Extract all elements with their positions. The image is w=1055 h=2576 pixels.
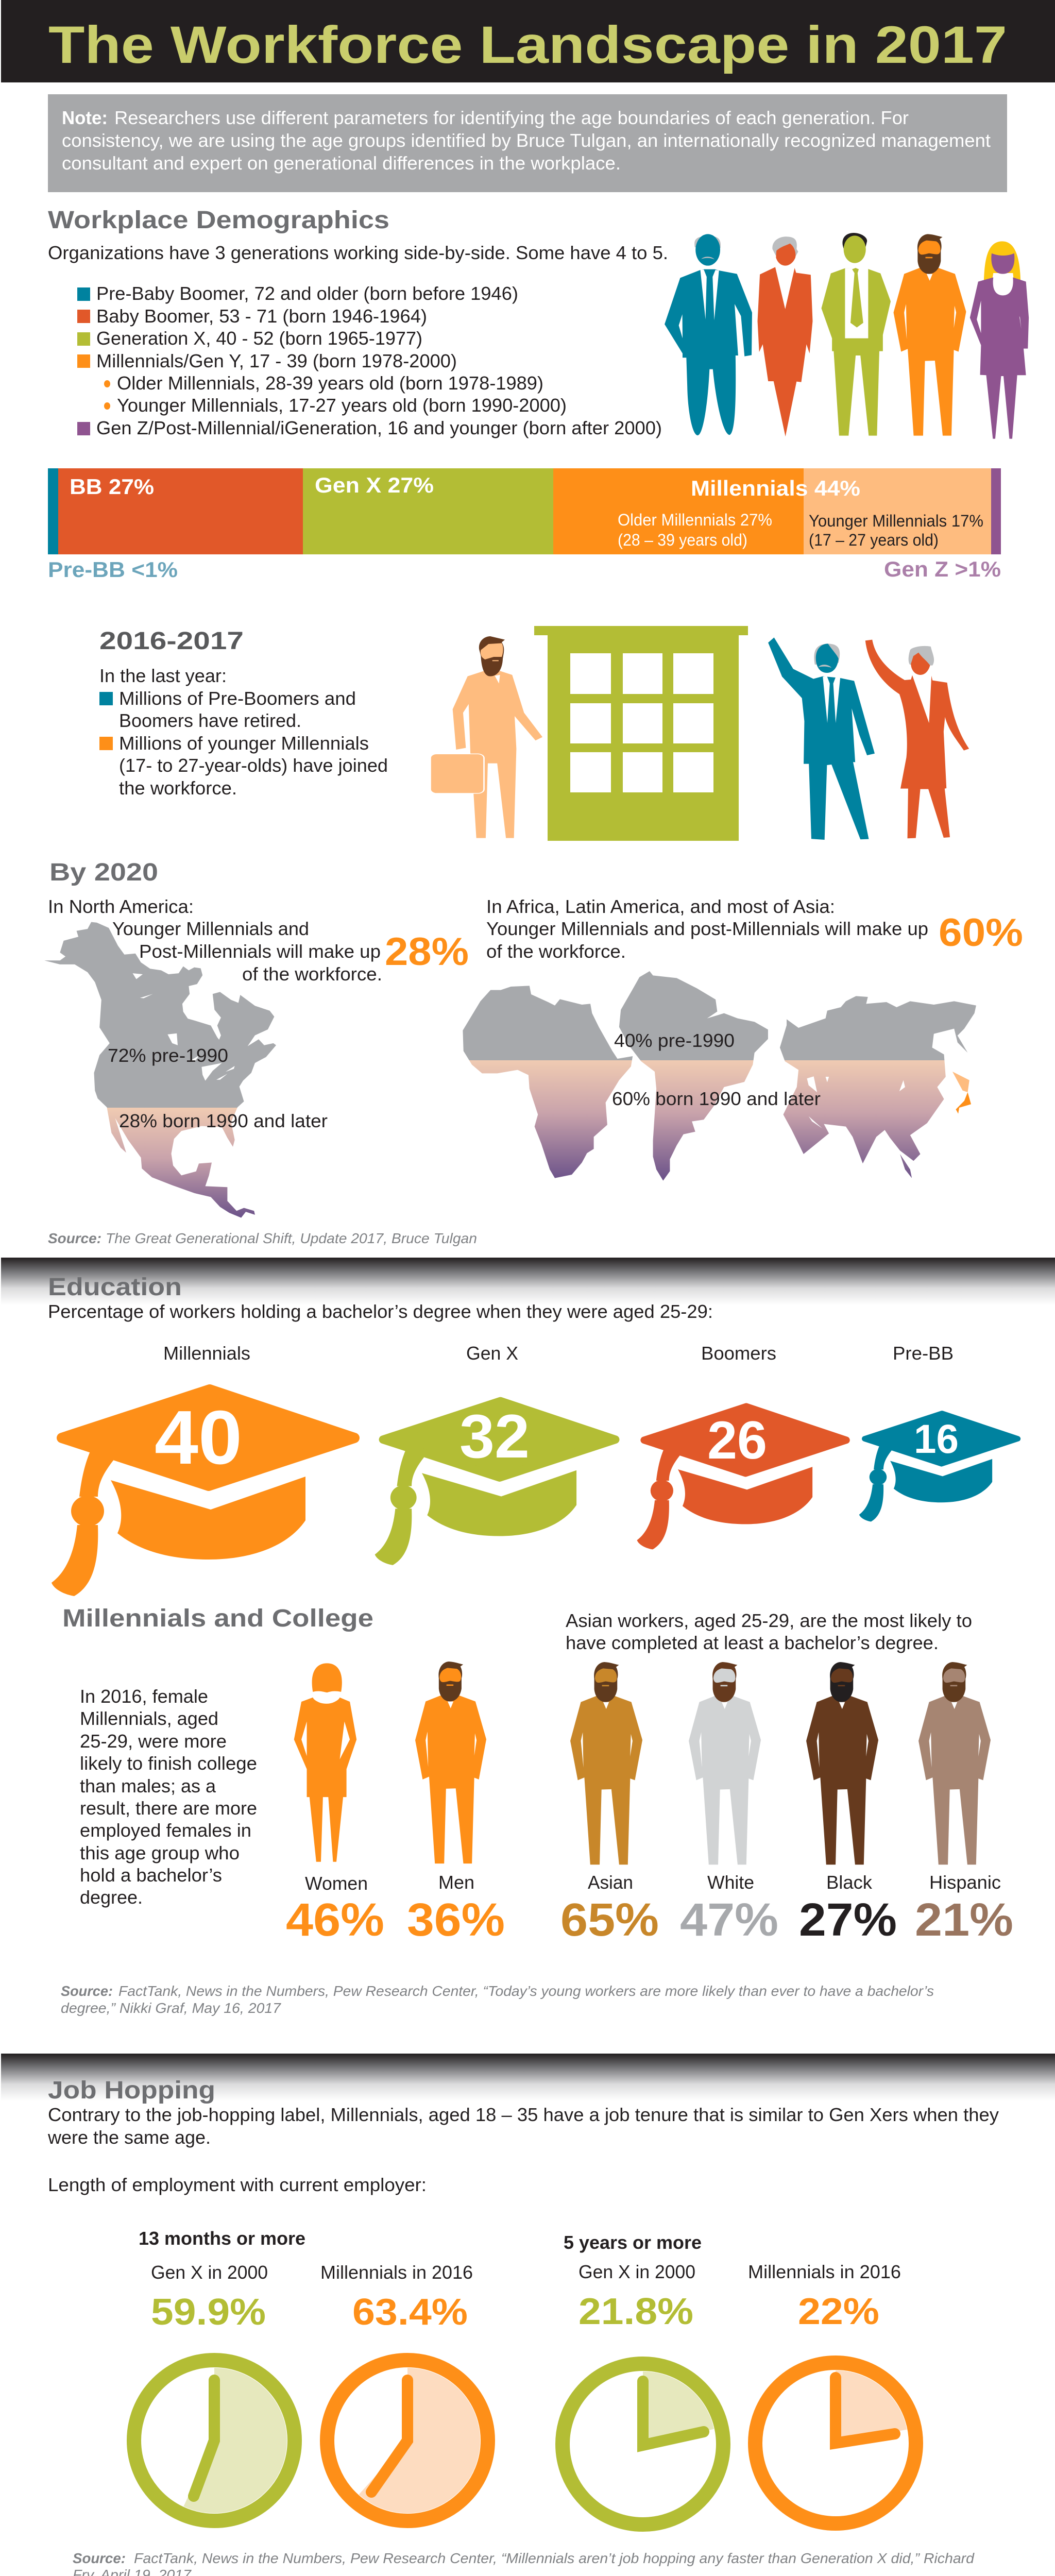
panel: 2016-2017 <box>99 626 969 841</box>
generation legend: Gen Z/Post-Millennial/iGeneration, 16 and younger (born after 2000) <box>96 417 662 438</box>
text: female millennials: likely to finish college <box>80 1753 257 1774</box>
cap label: boomers: Boomers <box>701 1343 776 1364</box>
intro text: Percentage of workers holding a bachelor’s degree when they were aged 25-29: <box>48 1301 713 1322</box>
text: north america: of the workforce. <box>242 963 382 985</box>
figure: pre-baby boomer <box>665 234 752 435</box>
figure: men <box>415 1662 486 1863</box>
generation legend: Older Millennials, 28-39 years old (born 1978-1989) <box>117 372 543 394</box>
source: job hopping: FactTank, News in the Numbers, Pew Research Center, “Millennials aren’t job hopping any faster than Generation X did,” Richard <box>134 2550 975 2566</box>
text: asian workers: have completed at least a bachelor’s degree. <box>566 1632 939 1653</box>
clock: millennials 13 months: 63.4% <box>352 2292 468 2333</box>
figure: retiring boomer man waving <box>768 637 875 840</box>
stat: 28%: 28% <box>385 930 469 974</box>
text: female millennials: result, there are more <box>80 1798 257 1819</box>
panel: note <box>48 94 1007 192</box>
percentages: 36% <box>407 1894 505 1946</box>
source: education: Source: <box>61 1983 113 1999</box>
text: in the last year: Millions of Pre-Boomers and <box>119 688 356 709</box>
text: female millennials: employed females in <box>80 1820 251 1841</box>
text: female millennials <box>80 1686 257 1908</box>
source: education: FactTank, News in the Numbers, Pew Research Center, “Today’s young workers are more likely than ever to have a bachelor’s <box>118 1983 934 1999</box>
cap label: pre-bb: Pre-BB <box>893 1343 954 1364</box>
panel: education <box>1 1258 1055 2016</box>
bar label: pre-bb: Pre-BB <1% <box>48 557 178 582</box>
clock: millennials 13 months <box>320 2262 488 2521</box>
map label: 40% pre-1990: 40% pre-1990 <box>614 1030 735 1051</box>
stacked bar: workforce share: (17 – 27 years old) <box>809 531 939 549</box>
stacked bar: workforce share: Younger Millennials 17% <box>809 512 983 530</box>
figure: white <box>689 1662 761 1865</box>
percentages <box>286 1894 1013 1946</box>
text: north america: Younger Millennials and <box>112 918 309 939</box>
text: female millennials: hold a bachelor’s <box>80 1865 222 1886</box>
icon: graduation cap pre-bb 16: 16 <box>914 1416 959 1462</box>
percentages: 65% <box>560 1894 659 1946</box>
note text: Researchers use different parameters for identifying the age boundaries of each generation. For <box>114 107 909 128</box>
text: africa latin america asia: Younger Millennials and post-Millennials will make up <box>486 918 928 939</box>
generation legend: Younger Millennials, 17-27 years old (born 1990-2000) <box>117 395 567 416</box>
source: job hopping <box>73 2550 975 2576</box>
figure: young millennial arriving with briefcase <box>430 636 542 838</box>
stacked bar: workforce share: Gen X 27% <box>315 473 434 497</box>
source: education: degree,” Nikki Graf, May 16, 2017 <box>61 2000 281 2016</box>
heading: millennials and college: Millennials and College <box>62 1605 373 1632</box>
clock: millennials 5 years <box>748 2261 916 2523</box>
clock: gen x 5 years: Gen X in 2000 <box>578 2261 695 2282</box>
map label: 60% born 1990 and later: 60% born 1990 and later <box>612 1088 821 1109</box>
map: africa, latin america, asia <box>463 971 976 1181</box>
percentages: 46% <box>286 1894 384 1946</box>
clock: gen x 5 years: 21.8% <box>578 2291 693 2332</box>
percentages: 47% <box>680 1894 778 1946</box>
title: The Workforce Landscape in 2017 <box>48 15 1007 74</box>
source: job hopping: Source: <box>73 2550 126 2566</box>
heading: workplace demographics: Workplace Demographics <box>48 207 389 234</box>
map label: 28% born 1990 and later: 28% born 1990 and later <box>119 1110 328 1131</box>
title banner <box>1 0 1055 82</box>
five generation figures <box>665 233 1029 439</box>
panel: job hopping <box>1 2054 1055 2576</box>
subheading: 5 years or more: 5 years or more <box>564 2232 702 2253</box>
icon: graduation cap boomers 26 <box>637 1406 846 1549</box>
intro text: Length of employment with current employer: <box>48 2174 427 2195</box>
clock: gen x 5 years <box>563 2261 723 2524</box>
icon: graduation cap millennials 40 <box>52 1389 354 1596</box>
intro text: Contrary to the job-hopping label, Millennials, aged 18 – 35 have a job tenure that is similar to Gen Xers when they <box>48 2104 999 2125</box>
figure: retiring boomer woman waving <box>865 640 969 838</box>
source: demographics: The Great Generational Shift, Update 2017, Bruce Tulgan <box>106 1230 477 1246</box>
figure: baby boomer <box>758 236 812 436</box>
clock: gen x 13 months <box>134 2262 295 2521</box>
figure labels <box>305 1872 1001 1894</box>
intro text <box>47 2104 999 2195</box>
panel: by 2020 <box>44 859 1023 1246</box>
source: demographics: Source: <box>48 1230 101 1246</box>
heading: by 2020: By 2020 <box>49 859 158 886</box>
text: asian workers: Asian workers, aged 25-29, are the most likely to <box>566 1610 972 1631</box>
generation legend: Generation X, 40 - 52 (born 1965-1977) <box>96 328 422 349</box>
text: female millennials: this age group who <box>80 1842 240 1863</box>
text: africa latin america asia: In Africa, Latin America, and most of Asia: <box>486 896 835 917</box>
icon: graduation cap millennials 40: 40 <box>155 1395 242 1480</box>
map: north america <box>44 922 276 1218</box>
figure: black <box>806 1662 878 1865</box>
stat: 60%: 60% <box>939 911 1023 955</box>
percentages: 27% <box>799 1894 897 1946</box>
figure: gen z <box>970 241 1029 439</box>
text: north america: Post-Millennials will make up <box>139 941 381 962</box>
text: in the last year: the workforce. <box>119 777 237 799</box>
stacked bar: workforce share: BB 27% <box>70 474 154 499</box>
text: in the last year: (17- to 27-year-olds) have joined <box>119 755 388 776</box>
cap label: gen x: Gen X <box>466 1343 518 1364</box>
source: education <box>61 1983 934 2016</box>
text: female millennials: 25-29, were more <box>80 1731 227 1752</box>
note text: Note: <box>62 107 108 128</box>
heading: 2016-2017: 2016-2017 <box>99 628 244 655</box>
text: female millennials: than males; as a <box>80 1775 216 1797</box>
figure labels: Black <box>826 1872 873 1893</box>
generation legend: Pre-Baby Boomer, 72 and older (born before 1946) <box>96 283 518 304</box>
figure: millennial <box>894 234 966 436</box>
text: in the last year: In the last year: <box>99 665 227 686</box>
text: asian workers <box>566 1610 972 1653</box>
clock: gen x 13 months: Gen X in 2000 <box>151 2262 268 2283</box>
figure: women <box>294 1663 356 1862</box>
figure: hispanic <box>918 1662 991 1865</box>
map label: 72% pre-1990: 72% pre-1990 <box>108 1045 228 1066</box>
generation legend: Millennials/Gen Y, 17 - 39 (born 1978-2000) <box>96 350 457 371</box>
stacked bar: workforce share: (28 – 39 years old) <box>618 531 747 549</box>
clock: millennials 5 years: Millennials in 2016 <box>748 2261 901 2282</box>
note text: consistency, we are using the age groups identified by Bruce Tulgan, an internationally recognized management <box>62 130 991 151</box>
figure labels: Men <box>438 1872 474 1893</box>
figure labels: Asian <box>588 1872 633 1893</box>
generation legend <box>77 283 662 438</box>
panel: workplace demographics <box>48 207 1029 439</box>
cap label: millennials: Millennials <box>163 1343 250 1364</box>
percentages: 21% <box>915 1894 1013 1946</box>
figure labels: Hispanic <box>929 1872 1001 1893</box>
text: female millennials: In 2016, female <box>80 1686 208 1707</box>
text: africa latin america asia: of the workforce. <box>486 941 626 962</box>
figure: generation x <box>821 233 891 436</box>
heading: job hopping: Job Hopping <box>48 2077 215 2104</box>
text: africa latin america asia <box>486 896 928 962</box>
text: female millennials: Millennials, aged <box>80 1708 218 1729</box>
text: in the last year: Boomers have retired. <box>119 710 301 731</box>
clock: gen x 13 months: 59.9% <box>151 2292 266 2333</box>
clock: millennials 5 years: 22% <box>798 2291 879 2332</box>
icon: office building <box>534 626 748 841</box>
clock: millennials 13 months: Millennials in 2016 <box>320 2262 473 2283</box>
bar label: gen z: Gen Z >1% <box>884 557 1001 581</box>
icon: graduation cap boomers 26: 26 <box>707 1411 767 1470</box>
figure labels: White <box>707 1872 754 1893</box>
figure: asian <box>570 1662 642 1865</box>
icon: graduation cap pre-bb 16 <box>859 1413 1018 1521</box>
stacked bar: workforce share: Millennials 44% <box>691 476 860 500</box>
text: in the last year <box>99 665 388 799</box>
stacked bar: workforce share: Older Millennials 27% <box>618 511 772 529</box>
note text: consultant and expert on generational differences in the workplace. <box>62 152 621 174</box>
text: in the last year: Millions of younger Millennials <box>119 733 369 754</box>
generation legend: Baby Boomer, 53 - 71 (born 1946-1964) <box>96 306 427 327</box>
intro text: were the same age. <box>47 2127 211 2148</box>
text: north america <box>48 896 382 985</box>
text: female millennials: degree. <box>80 1887 143 1908</box>
intro text: Organizations have 3 generations working side-by-side. Some have 4 to 5. <box>48 242 668 263</box>
note text <box>62 107 991 174</box>
figure labels: Women <box>305 1873 368 1894</box>
text: north america: In North America: <box>48 896 194 917</box>
icon: graduation cap gen x 32: 32 <box>460 1402 530 1471</box>
stacked bar: workforce share <box>48 468 1001 582</box>
subheading: 13 months or more: 13 months or more <box>139 2228 305 2249</box>
heading: education: Education <box>48 1274 182 1301</box>
icon: graduation cap gen x 32 <box>375 1401 616 1565</box>
